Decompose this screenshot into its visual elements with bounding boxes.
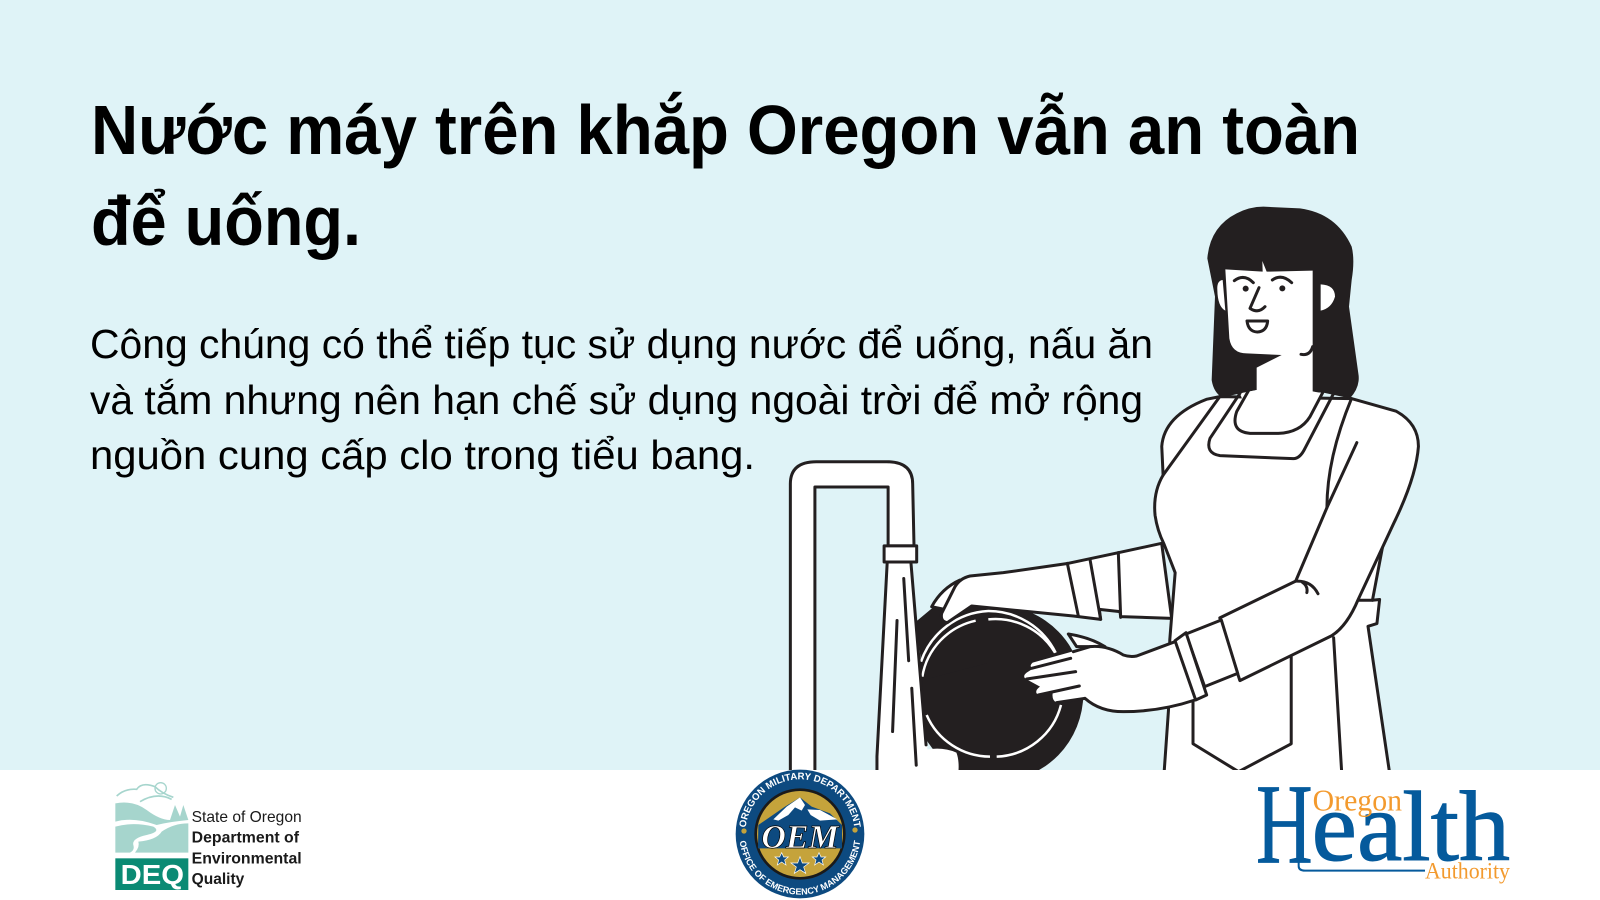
logo: OEM seal: OFFICE OF EMERGENCY MANAGEMENT [740,840,860,895]
text: agency name: Quality [192,871,245,888]
logo: OEM seal [736,770,864,898]
text: agency name: Environmental [192,850,302,867]
title [91,91,1360,260]
face [1225,261,1323,420]
logo: Oregon Health Authority: ealth [1312,771,1510,882]
logo: DEQ [115,783,302,890]
logo: OEM seal: OREGON MILITARY DEPARTMENT [740,772,861,827]
body text: và tắm nhưng nên hạn chế sử dụng ngoài trời để mở rộng [90,377,1143,423]
logo: Oregon Health Authority: H [1256,761,1313,888]
body text [90,321,1153,478]
torso and apron [1155,397,1392,787]
icon: landscape [115,783,188,890]
body text: Công chúng có thể tiếp tục sử dụng nước để uống, nấu ăn [90,321,1153,367]
water stream [877,546,959,787]
left arm and hand on plate [932,543,1172,623]
logo: Oregon Health Authority: Authority [1425,858,1510,884]
logo: Oregon Health Authority [1256,761,1510,888]
text: agency name: Department of [192,830,300,847]
body text: nguồn cung cấp clo trong tiểu bang. [90,432,755,478]
head and hair [1207,207,1359,459]
title: Nước máy trên khắp Oregon vẫn an toàn [91,91,1360,169]
icon: landscape: DEQ [121,859,184,890]
right hand holding plate [1024,620,1238,712]
faucet [790,462,914,787]
seal lettering: OEM [761,819,840,856]
plate [913,602,1083,781]
right arm and sleeve [1220,399,1418,681]
text: agency name: State of Oregon [192,809,302,826]
footer band [0,770,1600,900]
text: agency name [192,809,302,888]
title: để uống. [91,182,361,260]
logo: Oregon Health Authority: Oregon [1313,784,1402,818]
illustration: woman washing a plate at a faucet [790,207,1418,787]
